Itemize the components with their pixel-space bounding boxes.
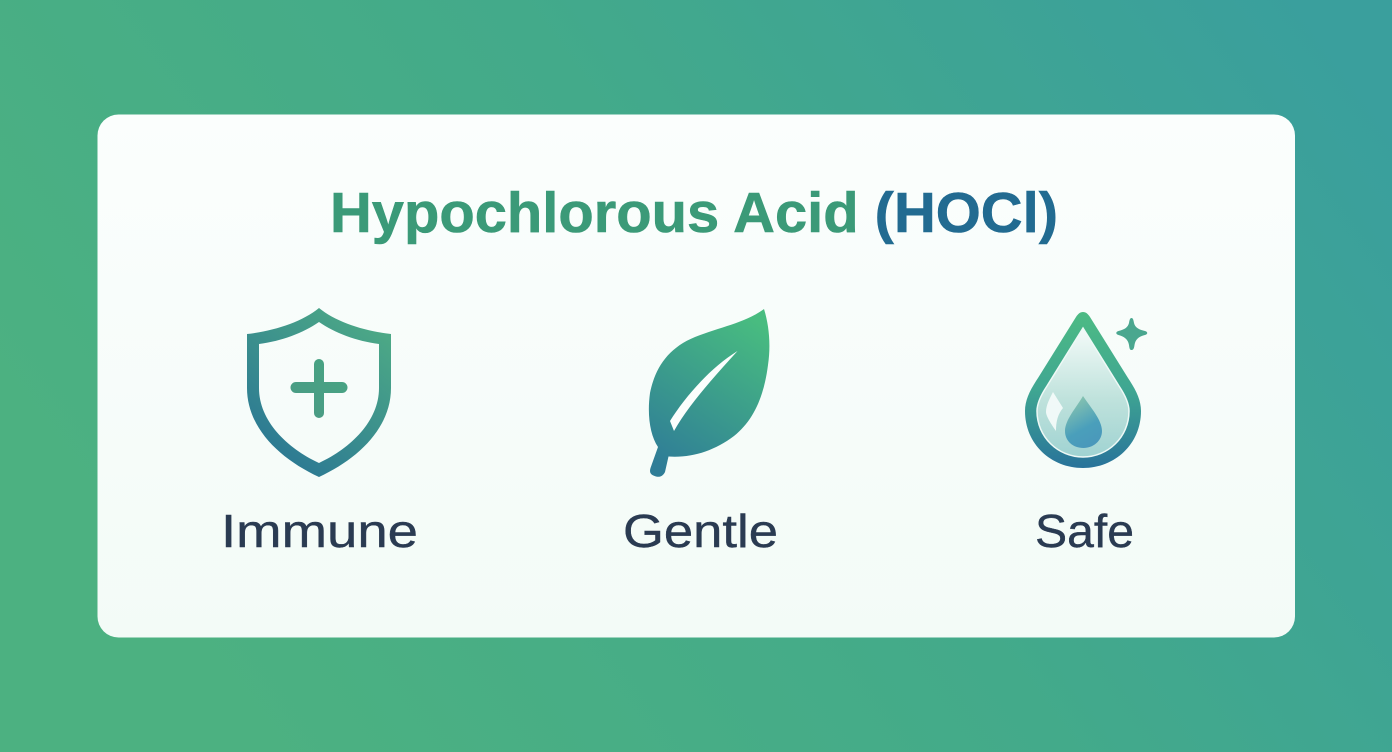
label: Safe: Safe — [1035, 505, 1134, 557]
label: Immune: Immune — [221, 505, 418, 557]
icon: leaf — [649, 309, 769, 477]
panel: main card — [98, 114, 1295, 638]
icon: plus sign — [290, 359, 348, 418]
icon: water drop with sparkle — [1025, 312, 1147, 468]
drop inner glass — [1037, 328, 1129, 457]
icon: leaf highlight — [670, 351, 738, 431]
drop rim — [1025, 312, 1141, 468]
icon: shield with plus — [247, 308, 391, 477]
reflection — [1046, 392, 1063, 431]
small inner drop — [1065, 396, 1102, 448]
sparkle — [1116, 318, 1147, 350]
title: Hypochlorous Acid (HOCl) — [330, 181, 1058, 245]
label: Gentle: Gentle — [623, 505, 778, 557]
